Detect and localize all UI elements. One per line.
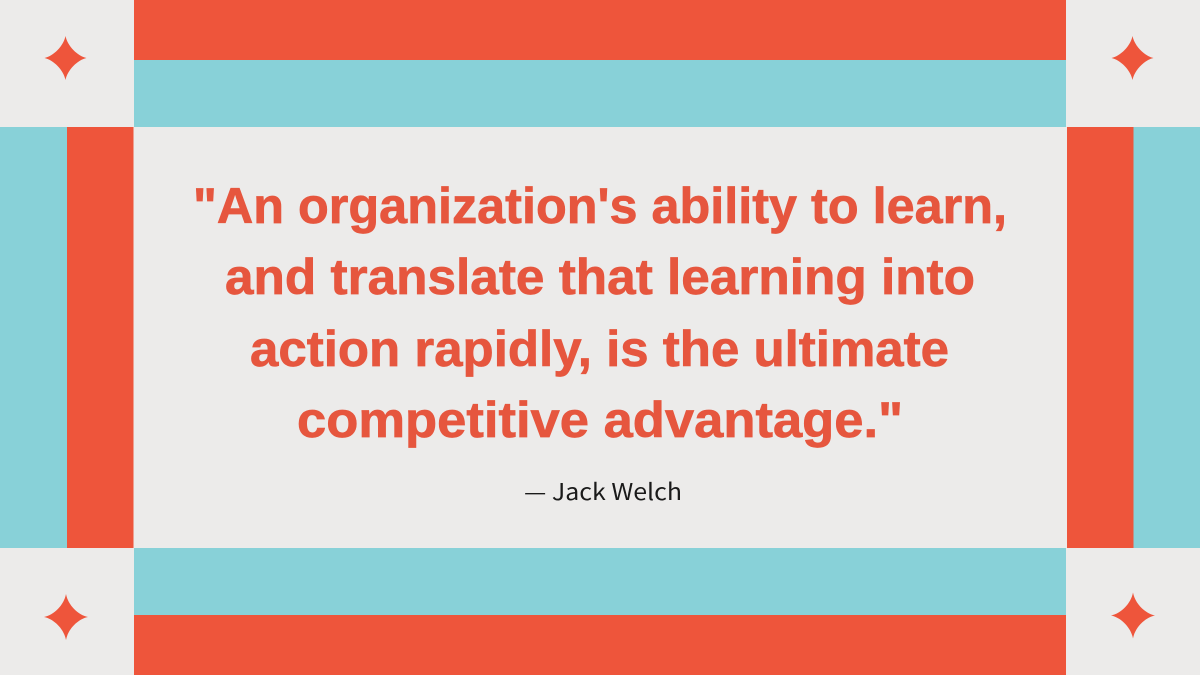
- quote text: [193, 178, 1007, 448]
- top border bands: [134, 0, 1066, 127]
- icon: sparkle top left: [44, 36, 86, 80]
- quote text: competitive advantage.": [297, 392, 903, 448]
- icon: sparkle top right: [1112, 36, 1154, 80]
- quote text: action rapidly, is the ultimate: [250, 321, 949, 377]
- left border bands: [0, 127, 134, 548]
- icon: sparkle bottom right: [1111, 592, 1155, 638]
- quote text: and translate that learning into: [225, 249, 975, 305]
- icon: sparkle bottom left: [44, 594, 88, 640]
- quote text: "An organization's ability to learn,: [193, 178, 1007, 234]
- bottom border bands: [134, 548, 1066, 675]
- right border bands: [1067, 127, 1200, 548]
- attribution: — Jack Welch: [524, 473, 682, 507]
